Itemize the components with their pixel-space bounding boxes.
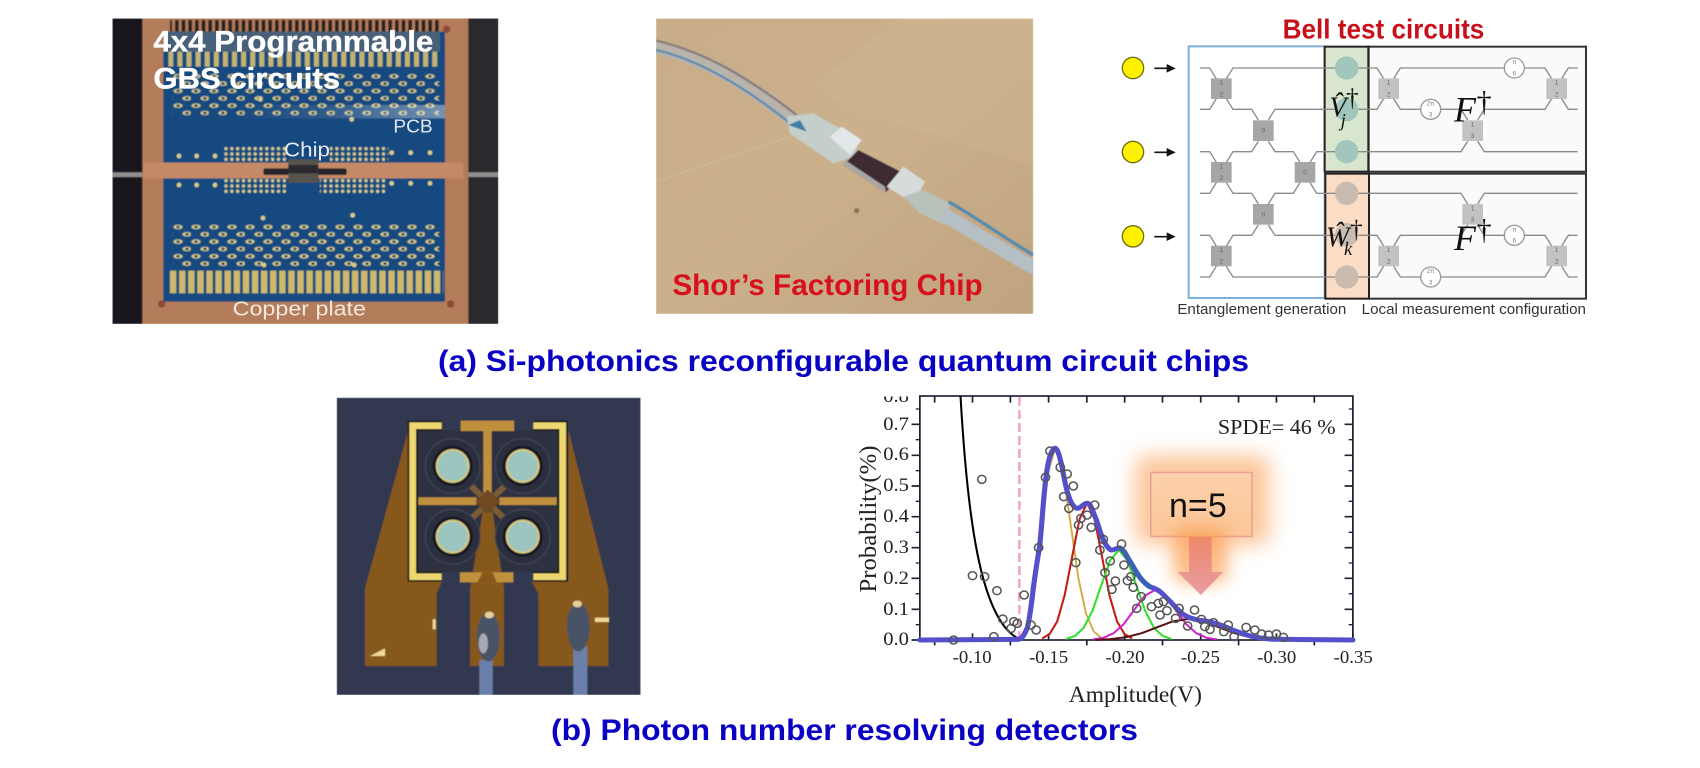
detector pixels xyxy=(425,439,550,564)
phase values: π xyxy=(1512,60,1516,66)
curve: n=1 gold xyxy=(1019,448,1102,639)
axes frame and ticks xyxy=(912,396,1353,645)
x axis tick labels: -0.15 xyxy=(1029,647,1068,667)
curve: total fit blue xyxy=(920,448,1353,640)
curve: n=4 magenta xyxy=(1093,590,1217,639)
y axis tick labels: 0.2 xyxy=(883,568,909,589)
math: V dagger: j xyxy=(1339,111,1346,132)
coupler values: 2 xyxy=(1387,92,1391,99)
coupler values: 3 xyxy=(1471,217,1475,224)
coupler values: 1 xyxy=(1220,80,1224,87)
phase shifters xyxy=(1421,58,1524,287)
phase nodes green xyxy=(1335,56,1358,163)
y axis tick labels: 0.5 xyxy=(883,475,909,496)
data points xyxy=(949,447,1287,644)
coupler values: 2 xyxy=(1387,259,1391,266)
box: local measurement upper xyxy=(1369,47,1586,172)
math: W dagger: Ŵ xyxy=(1326,223,1352,254)
heading: (a) Si-photonics reconfigurable quantum circuit chips: (a) Si-photonics reconfigurable quantum circuit chips xyxy=(438,345,1249,378)
math: F dagger lower: † xyxy=(1477,213,1492,246)
x axis tick labels xyxy=(953,647,1373,667)
y axis tick labels: 0.7 xyxy=(883,414,909,435)
annotation: SPDE: SPDE= 46 % xyxy=(1218,415,1336,439)
curve: n=2 red xyxy=(1042,503,1132,638)
coupler values: 1 xyxy=(1220,247,1224,254)
math: V dagger xyxy=(1329,84,1359,132)
callout: n=5 with glow and arrow xyxy=(1135,455,1270,595)
x axis tick labels: -0.20 xyxy=(1105,647,1145,667)
coupler values: 0 xyxy=(1262,128,1266,135)
math: F dagger lower xyxy=(1453,213,1492,258)
x axis title: Amplitude(V) xyxy=(1069,682,1202,708)
coupler values: 2 xyxy=(1220,175,1224,182)
curve: n=5 dark brown xyxy=(1095,619,1265,640)
math: F dagger upper: F xyxy=(1453,90,1477,130)
label: Copper plate: Copper plate xyxy=(233,299,366,321)
heading: (b) Photon number resolving detectors: (b) Photon number resolving detectors xyxy=(551,714,1138,747)
phase values: 2π xyxy=(1427,101,1434,107)
panel: Shor's factoring chip photo xyxy=(656,18,1035,314)
curve: steel-blue shoulder of fit xyxy=(1121,548,1150,587)
coupler values: 1 xyxy=(1387,80,1391,87)
label: PCB: PCB xyxy=(393,115,433,136)
phase values: π xyxy=(1512,227,1516,233)
coupler values: 0 xyxy=(1303,169,1307,176)
curve: noise peak black xyxy=(961,396,1022,640)
math: W dagger: k xyxy=(1344,239,1353,260)
curve: n=3 green xyxy=(1066,550,1171,639)
y axis tick labels: 0.1 xyxy=(883,599,909,620)
callout box xyxy=(1151,472,1252,536)
coupler values: 1 xyxy=(1471,122,1475,129)
coupler values: 3 xyxy=(1471,133,1475,140)
x axis tick labels: -0.30 xyxy=(1257,647,1296,667)
T and cross bars xyxy=(418,421,557,582)
phase values: 3 xyxy=(1429,280,1433,286)
detector arms xyxy=(469,484,507,520)
y axis tick labels: 0.6 xyxy=(883,444,909,465)
centre trunk pad xyxy=(469,590,505,667)
math: F dagger lower: F xyxy=(1453,218,1477,258)
y axis tick labels: 0.0 xyxy=(883,629,909,650)
math: F dagger upper xyxy=(1453,86,1492,130)
y axis tick labels: 0.4 xyxy=(883,506,910,527)
math: W dagger xyxy=(1326,215,1363,260)
coupler values: 1 xyxy=(1555,247,1559,254)
bond wires xyxy=(477,601,590,695)
coupler values: 2 xyxy=(1555,259,1559,266)
heading: 4x4 Programmable GBS circuits: GBS circuits xyxy=(153,62,340,95)
coupler values: 1 xyxy=(1555,80,1559,87)
box: local measurement lower xyxy=(1369,174,1586,299)
panel: 4x4 programmable GBS circuit photo xyxy=(112,18,498,324)
heading: 4x4 Programmable GBS circuits: 4x4 Programmable xyxy=(153,26,433,59)
inner window xyxy=(417,430,558,572)
caption: Local measurement configuration: Local measurement configuration xyxy=(1362,302,1586,318)
box: W column orange xyxy=(1325,174,1369,299)
panel: photon number resolving detector photo xyxy=(337,398,641,695)
phase nodes orange xyxy=(1335,182,1358,289)
phase values: 6 xyxy=(1513,71,1517,77)
math: W dagger: † xyxy=(1350,215,1363,243)
coupler values: 1 xyxy=(1220,163,1224,170)
label: Shor's Factoring Chip: Shor’s Factoring Chip xyxy=(672,269,983,302)
phase values: 2π xyxy=(1427,269,1434,275)
heading: Bell test circuits: Bell test circuits xyxy=(1283,13,1484,44)
chart: photon number amplitude histogram xyxy=(855,386,1373,708)
math: F dagger upper: † xyxy=(1477,86,1492,119)
callout label: n=5 xyxy=(1169,487,1227,525)
arrow down xyxy=(1178,537,1223,595)
math: V dagger: † xyxy=(1346,84,1359,112)
left contact pad xyxy=(365,430,442,666)
yellow brackets xyxy=(413,426,563,577)
coupler values: 2 xyxy=(1220,92,1224,99)
y axis tick labels: 0.8 xyxy=(883,386,909,407)
caption: Entanglement generation: Entanglement generation xyxy=(1177,302,1346,318)
coupler values: 1 xyxy=(1471,205,1475,212)
input photons and arrows xyxy=(1122,57,1176,247)
couplers: entanglement stage xyxy=(1211,78,1315,266)
waveguide network xyxy=(1200,68,1578,277)
phase values: 3 xyxy=(1429,113,1433,119)
coupler values: 2 xyxy=(1555,92,1559,99)
y axis tick labels: 0.3 xyxy=(883,537,909,558)
coupler values: 2 xyxy=(1220,259,1224,266)
box: V column green xyxy=(1325,47,1368,172)
couplers: measurement stage xyxy=(1378,78,1567,266)
math: V dagger: V̂ xyxy=(1329,93,1349,124)
phase values xyxy=(1427,60,1517,286)
x axis tick labels: -0.10 xyxy=(953,647,992,667)
x axis tick labels: -0.35 xyxy=(1334,647,1373,667)
coupler values: 0 xyxy=(1262,211,1266,218)
right contact pad xyxy=(532,430,608,666)
x axis tick labels: -0.25 xyxy=(1181,647,1220,667)
y axis title: Probability(%) xyxy=(855,446,882,592)
coupler values xyxy=(1220,80,1559,266)
threshold dashed line xyxy=(1018,397,1021,640)
heading: 4x4 Programmable GBS circuits xyxy=(154,30,432,89)
label: Chip: Chip xyxy=(284,140,330,162)
panel: Bell test circuits diagram xyxy=(1122,13,1586,318)
phase values: 6 xyxy=(1513,239,1517,245)
y axis tick labels xyxy=(884,396,909,645)
box: entanglement generation xyxy=(1189,46,1325,298)
coupler values: 1 xyxy=(1387,247,1391,254)
